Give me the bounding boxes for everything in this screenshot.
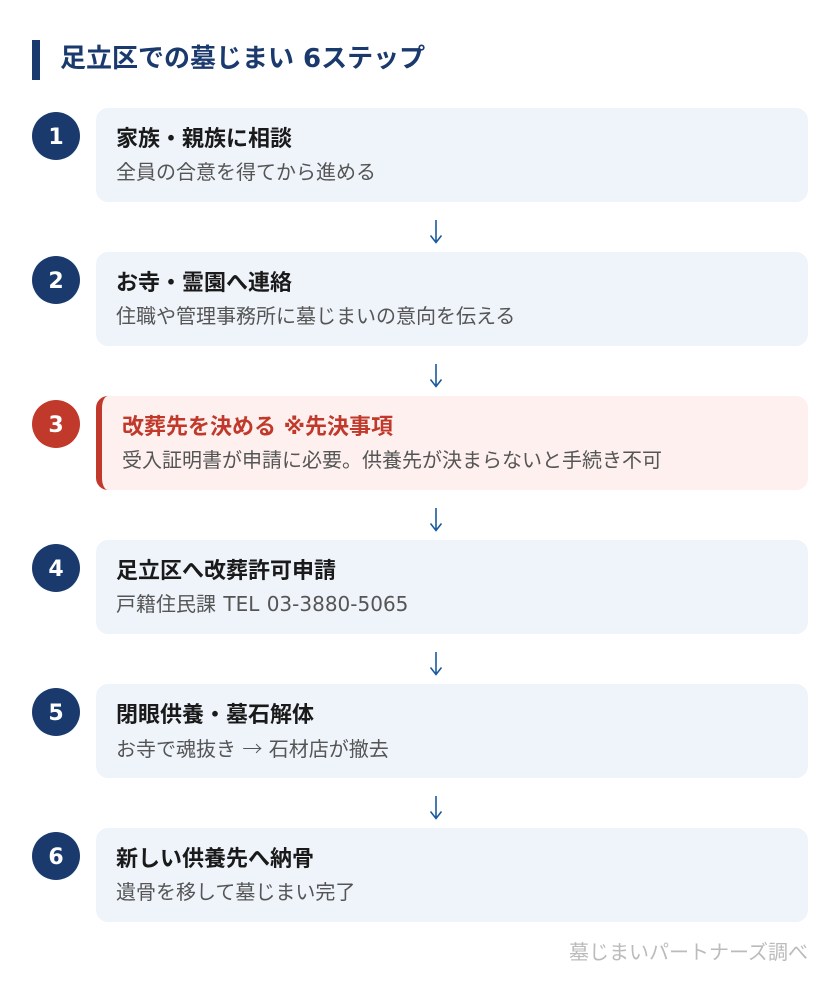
arrow 4 — [430, 652, 442, 676]
step 5 heading: 閉眼供養・墓石解体 — [116, 703, 314, 728]
step 6 heading: 新しい供養先へ納骨 — [116, 847, 314, 872]
step 3 number: 3 — [48, 413, 64, 438]
step 3 number — [32, 400, 80, 448]
step 3 highlighted card — [96, 396, 808, 490]
source note: 墓じまいパートナーズ調べ — [569, 940, 808, 964]
step 5 description: お寺で魂抜き → 石材店が撤去 — [116, 733, 389, 762]
title — [32, 40, 425, 80]
step 2 number — [32, 256, 80, 304]
step 3 description: 受入証明書が申請に必要。供養先が決まらないと手続き不可 — [122, 448, 662, 472]
step 1 number — [32, 112, 80, 160]
step 1 heading: 家族・親族に相談 — [116, 127, 292, 152]
step 4 number — [32, 544, 80, 592]
step 5 number: 5 — [48, 701, 64, 726]
step 2 card — [96, 252, 808, 346]
step 6 card — [96, 828, 808, 922]
arrow 3 — [430, 508, 442, 532]
step 2 description: 住職や管理事務所に墓じまいの意向を伝える — [116, 304, 515, 328]
arrow 5 — [430, 796, 442, 820]
step 5 number — [32, 688, 80, 736]
step 6 number — [32, 832, 80, 880]
step 6 number: 6 — [48, 845, 64, 870]
arrow 1 — [430, 220, 442, 244]
step 6 description: 遺骨を移して墓じまい完了 — [116, 880, 355, 904]
step 4 card — [96, 540, 808, 634]
step 1 card — [96, 108, 808, 202]
step 5 card — [96, 684, 808, 778]
title accent bar — [32, 40, 40, 80]
step 4 description: 戸籍住民課 TEL 03-3880-5065 — [116, 592, 408, 616]
step 2 number: 2 — [48, 269, 64, 294]
arrow 2 — [430, 364, 442, 388]
step 4 number: 4 — [48, 557, 64, 582]
step 1 description: 全員の合意を得てから進める — [116, 160, 376, 184]
step 2 heading: お寺・霊園へ連絡 — [116, 271, 292, 296]
step 1 number: 1 — [48, 125, 64, 150]
step 3 heading: 改葬先を決める ※先決事項 — [122, 415, 393, 440]
title text: 足立区での墓じまい 6ステップ — [60, 44, 425, 74]
step 4 heading: 足立区へ改葬許可申請 — [116, 559, 336, 584]
